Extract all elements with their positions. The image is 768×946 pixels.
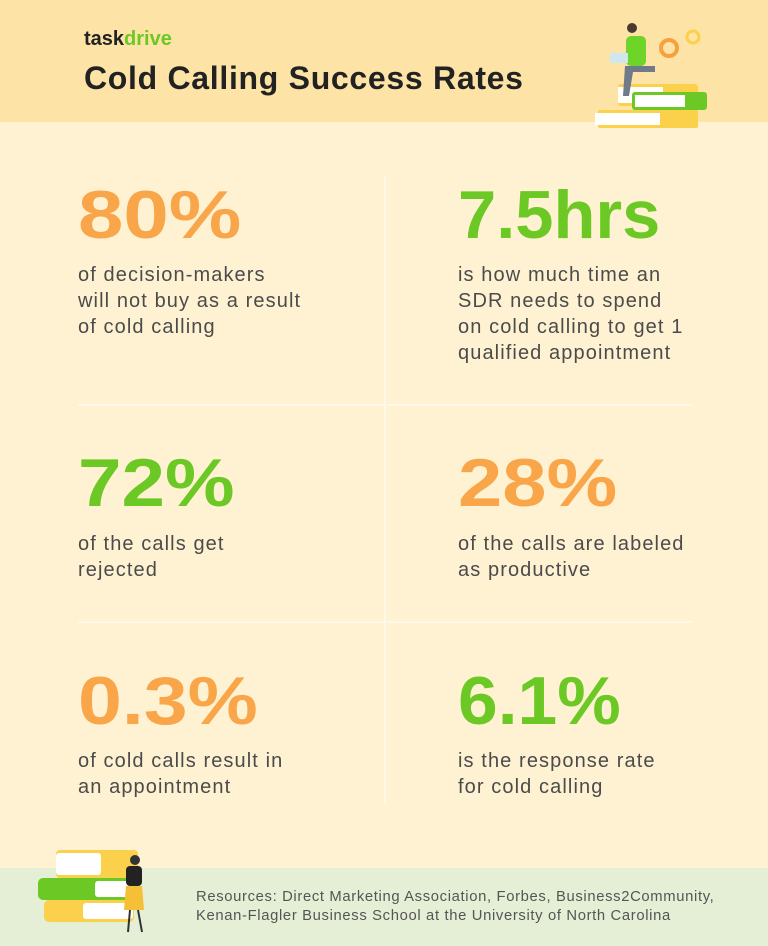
stat 28%: as productive (458, 559, 591, 581)
dividers (384, 175, 386, 805)
stat 28% (458, 445, 685, 581)
stat 0.3%: an appointment (78, 776, 231, 798)
logo: taskdrive (84, 28, 172, 50)
stat 80%: of cold calling (78, 316, 216, 338)
footer band (0, 868, 768, 946)
stat 72%: of the calls get (78, 533, 225, 555)
stat 80%: of decision-makers (78, 264, 266, 286)
sources: Resources: Direct Marketing Association, Forbes, Business2Community, (196, 889, 714, 905)
stat 6.1% (458, 663, 656, 798)
stat 80%: 80% (78, 177, 241, 253)
stat 7.5hrs (458, 177, 683, 364)
stat 7.5hrs: SDR needs to spend (458, 290, 662, 312)
stat 80%: will not buy as a result (78, 290, 301, 312)
stat 0.3% (78, 663, 283, 798)
stat 0.3%: of cold calls result in (78, 750, 283, 772)
stat 7.5hrs: is how much time an (458, 264, 661, 286)
stat 72%: rejected (78, 559, 158, 581)
stat 72%: 72% (78, 445, 235, 521)
stat 6.1%: for cold calling (458, 776, 603, 798)
sources: Kenan-Flagler Business School at the University of North Carolina (196, 908, 671, 924)
stat 6.1%: 6.1% (458, 663, 621, 739)
stat 6.1%: is the response rate (458, 750, 656, 772)
header band (0, 0, 768, 122)
illustration: woman with books (38, 850, 144, 932)
stat 72% (78, 445, 235, 581)
stat 7.5hrs: on cold calling to get 1 (458, 316, 683, 338)
illustration: man on books (595, 23, 707, 128)
stat 0.3%: 0.3% (78, 663, 258, 739)
stat 7.5hrs: 7.5hrs (458, 177, 660, 253)
stat 28%: of the calls are labeled (458, 533, 685, 555)
title: Cold Calling Success Rates (84, 60, 524, 96)
stat 28%: 28% (458, 445, 617, 521)
sources (196, 889, 714, 924)
stat 7.5hrs: qualified appointment (458, 342, 671, 364)
stat 80% (78, 177, 301, 338)
